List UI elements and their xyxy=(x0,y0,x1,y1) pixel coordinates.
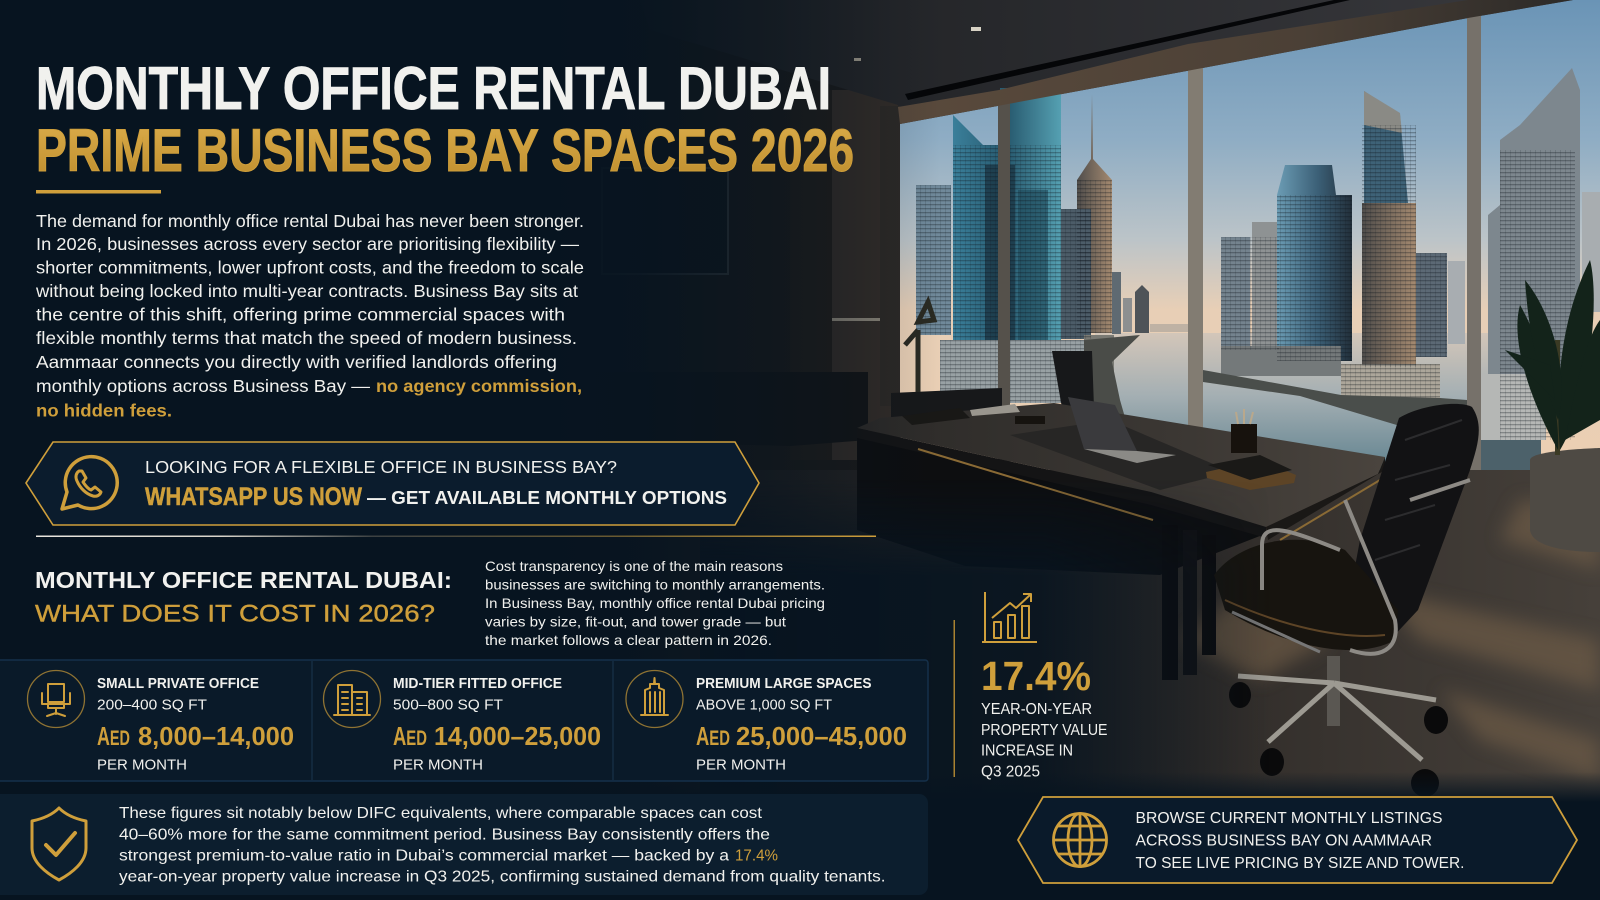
card: premium large spaces: PREMIUM LARGE SPACES xyxy=(696,676,872,692)
pen cup xyxy=(1231,424,1257,453)
shoreline xyxy=(1203,370,1467,447)
card: mid-tier fitted office: 500–800 SQ FT xyxy=(393,698,503,714)
floor xyxy=(560,470,1600,830)
column and star base xyxy=(1327,656,1340,726)
icon: office building xyxy=(324,670,380,728)
card: premium large spaces: AED xyxy=(696,721,730,751)
guest chair xyxy=(1052,351,1094,408)
section heading xyxy=(35,567,452,628)
folder and paper xyxy=(902,408,970,425)
callout: browse listings xyxy=(1018,797,1577,883)
icon: shield with check xyxy=(32,808,86,880)
callout: WhatsApp: — GET AVAILABLE MONTHLY OPTIONS xyxy=(367,488,727,508)
panel: pricing table xyxy=(0,660,928,781)
intro paragraph: Aammaar connects you directly with verified landlords offering xyxy=(36,352,557,372)
chrome arms xyxy=(1262,480,1470,654)
intro paragraph: monthly options across Business Bay — xyxy=(36,376,371,396)
icon: rising bar chart xyxy=(982,592,1037,642)
window-grid texture xyxy=(916,125,1575,440)
big glass tower xyxy=(953,88,1061,340)
intro paragraph: shorter commitments, lower upfront costs, and the freedom to scale xyxy=(36,258,584,278)
ceiling slot light xyxy=(905,0,1350,100)
section intro text: varies by size, fit-out, and tower grade — but xyxy=(485,614,786,630)
callout: browse listings: BROWSE CURRENT MONTHLY LISTINGS xyxy=(1136,810,1442,827)
dark overlays xyxy=(0,0,940,900)
icon: skyscraper xyxy=(626,670,683,728)
section intro text: the market follows a clear pattern in 2026. xyxy=(485,632,772,648)
panel: DIFC comparison note: 17.4% xyxy=(735,848,778,864)
callout: WhatsApp: WHATSAPP US NOW xyxy=(145,483,362,511)
podium xyxy=(940,340,1084,403)
section intro text: Cost transparency is one of the main reasons xyxy=(485,558,783,574)
photo: executive office with Dubai skyline xyxy=(658,0,1600,798)
spire tower xyxy=(1077,94,1112,333)
stat: 17.4% value increase: 17.4% xyxy=(981,653,1091,699)
card: premium large spaces xyxy=(626,670,907,774)
far towers xyxy=(916,185,1190,335)
panel: DIFC comparison note: strongest premium-to-value ratio in Dubai’s commercial market — backed by a xyxy=(119,848,729,864)
callout: WhatsApp xyxy=(26,442,759,525)
desk xyxy=(857,397,1385,680)
desk mat and laptop xyxy=(1010,420,1232,490)
callout: browse listings: TO SEE LIVE PRICING BY SIZE AND TOWER. xyxy=(1136,855,1464,872)
credenza xyxy=(590,372,868,446)
seat xyxy=(1214,540,1398,650)
icon: WhatsApp xyxy=(62,457,117,509)
card: mid-tier fitted office: MID-TIER FITTED OFFICE xyxy=(393,676,562,692)
window mullions xyxy=(998,102,1010,500)
title: PRIME BUSINESS BAY SPACES 2026 xyxy=(36,117,854,184)
card: small private office: PER MONTH xyxy=(97,756,187,774)
ceiling xyxy=(640,0,1600,124)
icon: globe xyxy=(1054,814,1106,866)
card: premium large spaces: 25,000–45,000 xyxy=(736,721,907,751)
section heading: MONTHLY OFFICE RENTAL DUBAI: xyxy=(35,567,452,593)
card: mid-tier fitted office xyxy=(324,670,601,774)
right tower xyxy=(1488,68,1580,380)
card: premium large spaces: PER MONTH xyxy=(696,756,786,774)
stat: 17.4% value increase xyxy=(954,592,1108,780)
intro paragraph: The demand for monthly office rental Dubai has never been stronger. xyxy=(36,211,584,231)
card: mid-tier fitted office: AED xyxy=(393,721,427,751)
section intro text xyxy=(485,558,825,648)
intro paragraph: without being locked into multi-year contracts. Business Bay sits at xyxy=(35,281,578,301)
central tan tower xyxy=(1364,91,1408,203)
intro paragraph xyxy=(35,211,584,420)
section heading: WHAT DOES IT COST IN 2026? xyxy=(35,600,435,628)
title: MONTHLY OFFICE RENTAL DUBAI xyxy=(36,55,831,122)
panel: DIFC comparison note: These figures sit notably below DIFC equivalents, where comparable spaces can cost xyxy=(119,805,763,822)
stat: 17.4% value increase: YEAR-ON-YEAR xyxy=(981,701,1092,718)
office chair xyxy=(1214,404,1479,797)
room wall xyxy=(560,0,980,560)
water xyxy=(1095,333,1490,473)
card: small private office: AED xyxy=(97,721,130,751)
intro paragraph: no agency commission, xyxy=(376,376,582,396)
intro paragraph: no hidden fees. xyxy=(36,400,172,420)
title xyxy=(36,55,854,184)
icon: office chair xyxy=(28,670,84,728)
panel: DIFC comparison note xyxy=(0,794,928,895)
card: small private office: SMALL PRIVATE OFFICE xyxy=(97,676,259,692)
card: small private office xyxy=(28,670,294,774)
picture frame xyxy=(602,168,728,274)
intro paragraph: In 2026, businesses across every sector are prioritising flexibility — xyxy=(36,234,580,254)
side table with ornament xyxy=(891,302,1002,420)
callout: WhatsApp: LOOKING FOR A FLEXIBLE OFFICE IN BUSINESS BAY? xyxy=(145,457,617,477)
intro paragraph: flexible monthly terms that match the speed of modern business. xyxy=(36,328,577,348)
callout: browse listings: ACROSS BUSINESS BAY ON AAMMAAR xyxy=(1136,832,1432,850)
skyline window xyxy=(900,0,1600,500)
stat: 17.4% value increase: Q3 2025 xyxy=(981,764,1040,780)
desk legs xyxy=(1162,525,1178,680)
card: mid-tier fitted office: PER MONTH xyxy=(393,756,483,774)
stat: 17.4% value increase: PROPERTY VALUE xyxy=(981,722,1108,739)
stat: 17.4% value increase: INCREASE IN xyxy=(981,742,1073,760)
card: mid-tier fitted office: 14,000–25,000 xyxy=(434,721,601,751)
panel: DIFC comparison note: 40–60% more for the same commitment period. Business Bay consistently offers the xyxy=(119,826,770,844)
plant xyxy=(1505,260,1600,552)
card: small private office: 8,000–14,000 xyxy=(138,721,294,751)
panel: DIFC comparison note: year-on-year property value increase in Q3 2025, confirming sustained demand from quality tenants. xyxy=(119,868,886,886)
card: premium large spaces: ABOVE 1,000 SQ FT xyxy=(696,698,832,714)
soffit xyxy=(898,0,1573,124)
notebooks xyxy=(1206,460,1296,490)
backrest xyxy=(1345,404,1479,640)
section intro text: businesses are switching to monthly arrangements. xyxy=(485,576,825,592)
intro paragraph: the centre of this shift, offering prime commercial spaces with xyxy=(36,304,565,324)
section intro text: In Business Bay, monthly office rental Dubai pricing xyxy=(485,595,825,611)
gold title rule xyxy=(36,190,161,194)
card: small private office: 200–400 SQ FT xyxy=(97,698,207,714)
